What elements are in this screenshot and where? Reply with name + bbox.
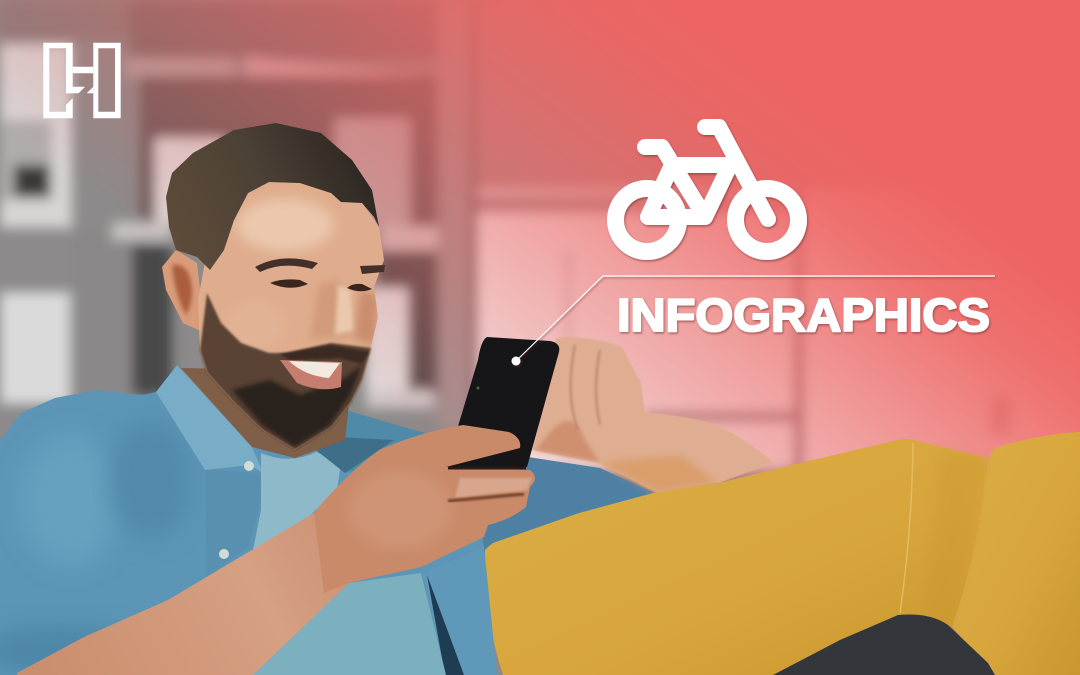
- right cushion: [952, 432, 1080, 675]
- face: [198, 182, 384, 450]
- neck: [181, 368, 350, 458]
- beard: [200, 293, 371, 450]
- mouth: [280, 360, 342, 389]
- head: [162, 123, 390, 455]
- title: INFOGRAPHICS: [617, 289, 990, 341]
- denim shirt: [0, 360, 500, 675]
- t-shirt upper: [252, 452, 341, 555]
- person: [0, 123, 559, 675]
- front hand: [314, 425, 535, 593]
- callout line: [512, 276, 995, 366]
- phone: [446, 337, 559, 467]
- right collar: [316, 410, 425, 473]
- forearm: [17, 513, 349, 675]
- raised arm and hand: [532, 337, 773, 493]
- icon: bicycle: [616, 127, 798, 252]
- ear: [162, 250, 205, 333]
- main cushion: [485, 439, 987, 675]
- eyes: [270, 279, 372, 291]
- placket: [206, 470, 263, 577]
- right shirt panel: [484, 555, 494, 640]
- collar left: [156, 365, 263, 473]
- trousers: [773, 614, 995, 675]
- sofa: [485, 432, 1080, 675]
- t-shirt lower: [253, 573, 446, 675]
- logo: [43, 43, 121, 118]
- callout dot: [512, 356, 520, 366]
- eyebrows: [255, 258, 385, 274]
- hair: [166, 123, 379, 270]
- shirt sleeve behind sofa: [470, 455, 657, 560]
